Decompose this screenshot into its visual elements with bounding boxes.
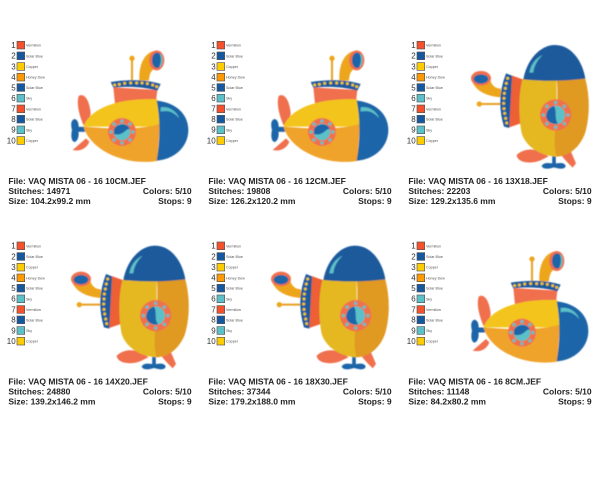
file details — [8, 176, 192, 206]
colour palette list: 3 — [411, 62, 416, 71]
colour palette list: Copper — [426, 139, 439, 143]
colour palette list: Vermilion — [426, 308, 441, 312]
file details: Stops: 9 — [358, 196, 392, 206]
panel: 10CM design — [7, 41, 192, 206]
colour palette list: Solar Blue — [426, 118, 443, 122]
colour palette list: Copper — [26, 266, 39, 270]
colour palette list: Vermilion — [226, 44, 241, 48]
colour palette list: 5 — [411, 284, 416, 293]
panel: 8CM design — [407, 242, 592, 407]
colour palette list: Solar Blue — [426, 287, 443, 291]
file details: Stops: 9 — [358, 397, 392, 407]
colour palette list: Sky — [226, 329, 232, 333]
colour palette list — [407, 242, 445, 346]
colour palette list: Sky — [26, 128, 32, 132]
file details: Size: 129.2x135.6 mm — [408, 196, 496, 206]
file details — [408, 377, 592, 407]
colour palette list: Sky — [426, 97, 432, 101]
colour palette list: Sky — [426, 297, 432, 301]
colour palette list: Solar Blue — [26, 318, 43, 322]
colour palette list: 10 — [407, 136, 416, 145]
file details: File: VAQ MISTA 06 - 16 10CM.JEF — [8, 176, 146, 186]
file details: Size: 104.2x99.2 mm — [8, 196, 91, 206]
colour palette list: 7 — [11, 305, 16, 314]
colour palette list: 10 — [7, 136, 16, 145]
colour palette list — [7, 242, 45, 346]
colour palette list: 7 — [211, 305, 216, 314]
colour palette list: Honey Dew — [26, 76, 45, 80]
colour palette list: Solar Blue — [426, 255, 443, 259]
file details — [208, 176, 392, 206]
file details — [8, 377, 192, 407]
file details: Colors: 5/10 — [143, 387, 192, 397]
colour palette list: Solar Blue — [26, 54, 43, 58]
file details: Colors: 5/10 — [543, 186, 592, 196]
colour palette list: Vermilion — [426, 107, 441, 111]
colour palette list: 4 — [11, 274, 16, 283]
colour palette list: Copper — [226, 139, 239, 143]
colour palette list: 7 — [211, 105, 216, 114]
colour palette list: 8 — [11, 316, 16, 325]
colour palette list: Copper — [26, 340, 39, 344]
colour palette list: 5 — [411, 83, 416, 92]
colour palette list: Vermilion — [426, 44, 441, 48]
colour palette list: 3 — [11, 263, 16, 272]
colour palette list: 3 — [11, 62, 16, 71]
colour palette list: 1 — [11, 242, 16, 251]
colour palette list: 5 — [11, 83, 16, 92]
panel: 12CM design — [207, 41, 392, 206]
file details: Size: 126.2x120.2 mm — [208, 196, 296, 206]
colour palette list: Sky — [26, 297, 32, 301]
file details: Stops: 9 — [158, 397, 192, 407]
colour palette list: Vermilion — [226, 308, 241, 312]
colour palette list: Honey Dew — [226, 276, 245, 280]
colour palette list: Copper — [226, 65, 239, 69]
colour palette list: Sky — [226, 128, 232, 132]
file details: Size: 84.2x80.2 mm — [408, 397, 486, 407]
colour palette list: Honey Dew — [426, 76, 445, 80]
colour palette list: 7 — [411, 305, 416, 314]
colour palette list: 2 — [11, 252, 16, 261]
file details: Colors: 5/10 — [543, 387, 592, 397]
icon: horizontal submarine — [471, 251, 588, 363]
file details: Size: 179.2x188.0 mm — [208, 397, 296, 407]
file details: Size: 139.2x146.2 mm — [8, 397, 96, 407]
colour palette list: Copper — [226, 266, 239, 270]
colour palette list: 7 — [11, 105, 16, 114]
colour palette list: 2 — [11, 52, 16, 61]
colour palette list: Solar Blue — [26, 86, 43, 90]
colour palette list: 6 — [211, 94, 216, 103]
colour palette list: Honey Dew — [426, 276, 445, 280]
colour palette list: 4 — [211, 274, 216, 283]
colour palette list: 8 — [11, 115, 16, 124]
colour palette list: 4 — [11, 73, 16, 82]
panel: 18X30 design — [207, 242, 392, 407]
colour palette list: 9 — [211, 126, 216, 135]
colour palette list: Vermilion — [426, 244, 441, 248]
colour palette list: Solar Blue — [226, 54, 243, 58]
colour palette list: 5 — [11, 284, 16, 293]
colour palette list: Copper — [26, 65, 39, 69]
colour palette list: 4 — [411, 274, 416, 283]
colour palette list: 10 — [207, 136, 216, 145]
colour palette list: Honey Dew — [26, 276, 45, 280]
file details — [208, 377, 392, 407]
panel: 13X18 design — [407, 41, 592, 206]
colour palette list: Copper — [426, 340, 439, 344]
file details: Colors: 5/10 — [143, 186, 192, 196]
colour palette list — [207, 41, 245, 145]
colour palette list: Vermilion — [26, 244, 41, 248]
icon: horizontal submarine — [271, 50, 388, 162]
colour palette list: 6 — [211, 295, 216, 304]
file details: Stops: 9 — [558, 397, 592, 407]
colour palette list: 1 — [411, 242, 416, 251]
colour palette list: Solar Blue — [426, 318, 443, 322]
colour palette list: Vermilion — [226, 107, 241, 111]
file details: Stops: 9 — [158, 196, 192, 206]
colour palette list: Vermilion — [26, 107, 41, 111]
colour palette list: Copper — [426, 266, 439, 270]
panel: 14X20 design — [7, 242, 192, 407]
colour palette list: Solar Blue — [26, 118, 43, 122]
file details: File: VAQ MISTA 06 - 16 18X30.JEF — [208, 377, 348, 387]
colour palette list: 3 — [211, 263, 216, 272]
colour palette list: 9 — [411, 326, 416, 335]
colour palette list: Solar Blue — [426, 54, 443, 58]
colour palette list: Vermilion — [26, 308, 41, 312]
colour palette list: 5 — [211, 83, 216, 92]
file details: Stitches: 14971 — [8, 186, 71, 196]
colour palette list: Sky — [26, 97, 32, 101]
colour palette list: Vermilion — [226, 244, 241, 248]
colour palette list: 9 — [11, 126, 16, 135]
colour palette list: 3 — [411, 263, 416, 272]
colour palette list — [407, 41, 445, 145]
colour palette list: 1 — [11, 41, 16, 50]
icon: vertical submarine — [271, 246, 389, 369]
colour palette list: Copper — [226, 340, 239, 344]
colour palette list: 6 — [11, 94, 16, 103]
colour palette list: 9 — [11, 326, 16, 335]
file details: Stitches: 37344 — [208, 387, 271, 397]
colour palette list: Vermilion — [26, 44, 41, 48]
colour palette list: Sky — [26, 329, 32, 333]
colour palette list: 10 — [407, 337, 416, 346]
icon: vertical submarine — [71, 246, 189, 369]
colour palette list: Solar Blue — [26, 255, 43, 259]
colour palette list: 10 — [7, 337, 16, 346]
colour palette list: Sky — [426, 329, 432, 333]
colour palette list — [7, 41, 45, 145]
colour palette list: 8 — [211, 115, 216, 124]
colour palette list: Solar Blue — [226, 287, 243, 291]
colour palette list: Solar Blue — [426, 86, 443, 90]
colour palette list: Solar Blue — [26, 287, 43, 291]
colour palette list: Solar Blue — [226, 318, 243, 322]
icon: horizontal submarine — [71, 50, 188, 162]
colour palette list: 4 — [211, 73, 216, 82]
colour palette list — [207, 242, 245, 346]
file details: Stitches: 11148 — [408, 387, 470, 397]
colour palette list: 8 — [411, 115, 416, 124]
colour palette list: Solar Blue — [226, 118, 243, 122]
colour palette list: 9 — [411, 126, 416, 135]
colour palette list: 2 — [411, 52, 416, 61]
colour palette list: 2 — [211, 52, 216, 61]
file details: File: VAQ MISTA 06 - 16 12CM.JEF — [208, 176, 346, 186]
colour palette list: Solar Blue — [226, 255, 243, 259]
colour palette list: Copper — [426, 65, 439, 69]
colour palette list: 1 — [411, 41, 416, 50]
colour palette list: 7 — [411, 105, 416, 114]
colour palette list: Sky — [226, 97, 232, 101]
colour palette list: 6 — [411, 94, 416, 103]
colour palette list: 8 — [211, 316, 216, 325]
file details: File: VAQ MISTA 06 - 16 14X20.JEF — [8, 377, 148, 387]
colour palette list: 8 — [411, 316, 416, 325]
colour palette list: 3 — [211, 62, 216, 71]
colour palette list: 4 — [411, 73, 416, 82]
file details: Colors: 5/10 — [343, 186, 392, 196]
file details: Stops: 9 — [558, 196, 592, 206]
colour palette list: 1 — [211, 41, 216, 50]
colour palette list: Solar Blue — [226, 86, 243, 90]
colour palette list: Copper — [26, 139, 39, 143]
colour palette list: 10 — [207, 337, 216, 346]
colour palette list: Honey Dew — [226, 76, 245, 80]
colour palette list: 6 — [411, 295, 416, 304]
colour palette list: Sky — [426, 128, 432, 132]
file details: Stitches: 19808 — [208, 186, 271, 196]
colour palette list: Sky — [226, 297, 232, 301]
colour palette list: 2 — [411, 252, 416, 261]
file details: File: VAQ MISTA 06 - 16 8CM.JEF — [408, 377, 541, 387]
colour palette list: 6 — [11, 295, 16, 304]
file details: Stitches: 24880 — [8, 387, 71, 397]
colour palette list: 1 — [211, 242, 216, 251]
colour palette list: 2 — [211, 252, 216, 261]
file details — [408, 176, 592, 206]
colour palette list: 5 — [211, 284, 216, 293]
icon: vertical submarine — [471, 45, 589, 169]
file details: Stitches: 22203 — [408, 186, 471, 196]
file details: File: VAQ MISTA 06 - 16 13X18.JEF — [408, 176, 548, 186]
file details: Colors: 5/10 — [343, 387, 392, 397]
colour palette list: 9 — [211, 326, 216, 335]
